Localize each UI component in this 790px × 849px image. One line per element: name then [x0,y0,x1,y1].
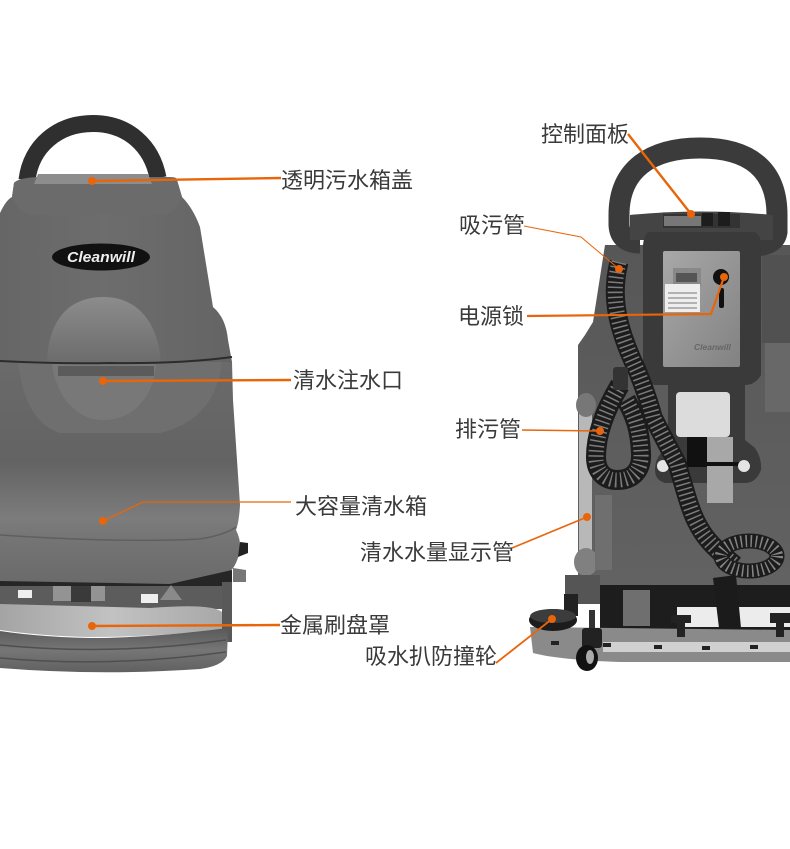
label: bumper wheel: 吸水扒防撞轮 [365,644,497,669]
plate brand: Cleanwill [694,342,731,352]
hose clamp [613,367,628,390]
squeegee bar [530,627,790,662]
bar slots [551,641,758,650]
left frame [565,575,600,604]
callout: suction pipe [524,226,622,272]
shoulder shading [12,177,182,215]
label: control panel: 控制面板 [541,122,629,147]
lower recess [595,495,612,570]
upper side panel [762,255,790,343]
handle [619,148,777,246]
dark control housing [643,232,761,385]
label: suction pipe: 吸污管 [459,213,525,238]
callout: level tube [512,514,590,548]
water inlet recess [18,362,222,433]
spec label [665,284,700,312]
display [673,268,701,286]
steel plate [676,392,730,437]
side bracket [233,568,246,582]
castor block [623,590,650,626]
label: power lock: 电源锁 [458,304,524,329]
callout: drain pipe [522,428,604,434]
left machine: front view [0,124,248,672]
deck dark gap [0,570,232,586]
callout: tank [100,502,291,524]
drain loop hose [596,385,641,480]
deck area [0,585,222,609]
label: drain pipe: 排污管 [455,417,521,442]
label: transparent lid: 透明污水箱盖 [281,168,413,193]
switches [702,213,713,226]
bumper wheel [529,609,577,631]
squeegee light strip [603,642,790,652]
callout: power lock [527,274,728,316]
lower dark housing [655,374,761,483]
callout: brush cover [88,622,280,630]
caster wheel [576,610,602,671]
black gap [687,437,707,467]
metal control plate [663,251,740,367]
deck gap highlights [677,607,790,627]
transparent dirty water tank lid [34,174,152,184]
long suction hose [615,262,735,565]
lower body [0,362,240,585]
white knobs [657,460,669,472]
key lock [713,269,729,285]
rubber skirt [0,628,228,672]
callout: lid [88,178,281,184]
water level tube [579,402,592,572]
label: water inlet: 清水注水口 [293,368,403,393]
deck dark area [600,585,790,635]
lower band shadow [0,527,236,540]
coil hose [721,541,777,571]
callout: bumper wheel [496,616,556,663]
metal brush cover [0,604,222,637]
knobs [671,613,790,637]
label: tank: 大容量清水箱 [295,494,427,519]
inlet dome lower [52,364,156,420]
logo badge [52,244,150,270]
seam [0,357,232,363]
upper body [0,177,232,362]
right machine: rear view [529,148,790,671]
control top bar [630,212,773,240]
right shoulder panel [765,342,790,412]
outlet pipe [713,575,741,628]
rear body [578,245,790,590]
dome cover [47,297,161,362]
hub [53,586,105,601]
label: water level tube: 清水水量显示管 [360,540,514,565]
switch bank [663,214,740,228]
control panel strip [664,216,701,226]
logo badge: Cleanwill [67,250,136,266]
bracket [707,437,733,503]
bolts [18,590,32,598]
label: brush cover: 金属刷盘罩 [280,613,390,638]
callout: control panel [628,134,694,218]
inlet slot [58,366,154,376]
handle [27,124,158,180]
callout: inlet [100,378,291,384]
callout lines and dots [88,134,728,663]
